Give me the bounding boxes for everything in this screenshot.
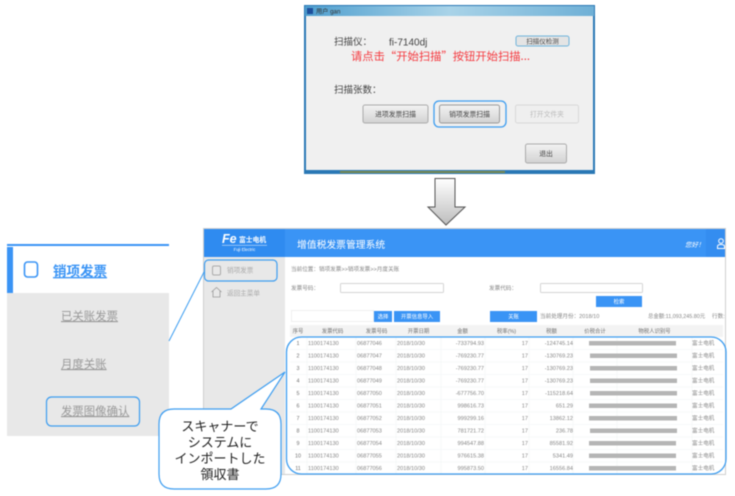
table rows: -130769.23: [545, 366, 573, 372]
table rows: -130769.23: [545, 379, 573, 385]
search form: 检索: [614, 298, 625, 306]
callout text: 領収書: [200, 467, 240, 482]
table rows: -733794.93: [456, 341, 484, 347]
callout text: システムに: [188, 435, 252, 450]
table rows: 06877048: [357, 366, 382, 372]
table rows: 06877056: [357, 466, 382, 472]
table rows: 1100174130: [308, 379, 339, 385]
table rows: -677756.70: [456, 391, 484, 397]
table rows: 06877047: [357, 354, 382, 360]
table rows: 17: [522, 354, 528, 360]
invoice image confirm link: 发票图像确认: [61, 404, 130, 418]
table rows: 17: [522, 441, 528, 447]
logo block: Fe: [222, 232, 237, 246]
table rows: 1: [296, 341, 300, 347]
toolbar: [292, 310, 725, 322]
greeting: 您好！: [685, 241, 704, 249]
table rows: 富士电机: [692, 339, 715, 347]
table rows: 富士电机: [692, 352, 715, 360]
table rows: -769230.77: [456, 354, 484, 360]
table rows: 2018/10/30: [397, 341, 425, 347]
sales invoice scan button: [440, 105, 500, 123]
open folder button: 打开文件夹: [530, 110, 564, 118]
invoice table: [290, 325, 723, 474]
red instruction: 请点击“开始扫描”按钮开始扫描...: [351, 48, 530, 64]
toolbar: 关账: [508, 312, 519, 320]
breadcrumb: 当前位置：销项发票>>销项发票>>月度关账: [291, 265, 400, 273]
table rows: 17: [522, 466, 528, 472]
menu heading: 销项发票: [53, 263, 107, 279]
highlight on confirm link: [46, 397, 140, 426]
table rows: 1100174130: [308, 341, 339, 347]
table rows: 1100174130: [308, 366, 339, 372]
table rows: 2018/10/30: [397, 466, 425, 472]
toolbar: 行数:: [712, 312, 725, 320]
panel: zoomed menu: [7, 244, 169, 436]
logo block: 富士电机: [239, 235, 266, 244]
table rows: 85581.92: [550, 441, 573, 447]
search form: 发票号码：: [291, 284, 319, 292]
callout text: スキャナーで: [181, 419, 259, 434]
table rows: -130769.23: [545, 354, 573, 360]
table rows: 富士电机: [692, 389, 715, 397]
table rows: 富士电机: [692, 364, 715, 372]
sidebar item: main menu: 返回主菜单: [227, 288, 260, 298]
table rows: 06877052: [357, 416, 382, 422]
table rows: 10: [295, 454, 301, 460]
table rows: 17: [522, 454, 528, 460]
table rows: 17: [522, 341, 528, 347]
table header: 物税人识别号: [638, 327, 671, 335]
table rows: 2018/10/30: [397, 404, 425, 410]
monthly closing link: 月度关账: [61, 357, 107, 371]
table rows: 8: [296, 429, 300, 435]
table header: 税率(%): [497, 327, 516, 335]
table rows: 1100174130: [308, 466, 339, 472]
table rows: 2: [296, 354, 300, 360]
arrow: down: [428, 178, 465, 225]
scan count label: 扫描张数：: [334, 84, 382, 96]
table rows: 2018/10/30: [397, 416, 425, 422]
table rows: 06877046: [357, 341, 382, 347]
table header: 序号: [293, 327, 304, 335]
scanner label: 扫描仪：: [334, 36, 372, 48]
table rows: 976615.38: [458, 454, 484, 460]
table header: 开票日期: [408, 328, 429, 335]
table rows: 4: [296, 379, 300, 385]
table rows: 1100174130: [308, 404, 339, 410]
header bar: [204, 229, 725, 257]
table rows: 富士电机: [692, 377, 715, 385]
table rows: 2018/10/30: [397, 441, 425, 447]
table rows: 7: [296, 416, 300, 422]
table header: [290, 325, 723, 337]
table rows: 994547.88: [458, 441, 484, 447]
toolbar: 选择: [378, 312, 389, 320]
table rows: 06877051: [357, 404, 382, 410]
table rows: 富士电机: [692, 427, 715, 435]
table rows: 17: [522, 416, 528, 422]
scanner check button: [516, 36, 569, 46]
table rows: 16556.84: [550, 466, 573, 472]
exit button: [526, 144, 566, 163]
table rows: 6: [296, 404, 300, 410]
table rows: 1100174130: [308, 391, 339, 397]
scanner check button: 扫描仪检测: [526, 36, 559, 46]
table rows: 富士电机: [692, 464, 715, 472]
table rows: 998616.73: [458, 404, 484, 410]
table rows: 651.29: [556, 404, 573, 410]
table rows: -769230.77: [456, 366, 484, 372]
search form: [291, 284, 642, 307]
scanner model: fi-7140dj: [389, 38, 427, 48]
table rows: 13862.12: [550, 416, 573, 422]
table header: 发票代码: [322, 327, 344, 335]
callout text: [174, 419, 266, 482]
table rows: -115218.64: [545, 391, 573, 397]
callout text: インポートした: [174, 451, 266, 466]
exit button: 退出: [539, 149, 553, 158]
table rows: 06877049: [357, 379, 382, 385]
sidebar item: main menu: [212, 288, 260, 298]
table rows: 富士电机: [692, 402, 715, 410]
table rows: 5: [296, 391, 300, 397]
toolbar: 开票信息导入: [401, 312, 434, 320]
table rows: 2018/10/30: [397, 354, 425, 360]
table rows: -769230.77: [456, 379, 484, 385]
toolbar: 总金额:11,093,245.80元: [648, 312, 706, 320]
dialog title: 用户 gan: [316, 8, 341, 16]
table rows: 1100174130: [308, 416, 339, 422]
table header: 税额: [546, 327, 557, 335]
table rows: 06877054: [357, 441, 382, 447]
icon: user: [718, 239, 724, 248]
table rows: 999299.16: [458, 416, 484, 422]
table rows: 06877050: [357, 391, 382, 397]
table rows: 2018/10/30: [397, 454, 425, 460]
table rows: [295, 339, 715, 472]
table rows: 1100174130: [308, 454, 339, 460]
search form: 发票代码：: [489, 284, 517, 292]
table rows: 17: [522, 391, 528, 397]
sidebar item: sales invoice: [212, 266, 254, 275]
table rows: 236.78: [556, 429, 573, 435]
icon: checkbox: [24, 262, 38, 277]
toolbar: 当前处理月份：2018/10: [540, 312, 599, 320]
table rows: -124745.14: [545, 341, 573, 347]
table rows: 2018/10/30: [397, 366, 425, 372]
table rows: 1100174130: [308, 429, 339, 435]
purchase invoice scan button: 进项发票扫描: [375, 110, 416, 118]
table rows: 3: [296, 366, 300, 372]
sales invoice scan button: 销项发票扫描: [449, 110, 490, 118]
logo block: Fuji Electric: [234, 247, 255, 252]
table rows: 06877053: [357, 429, 382, 435]
table rows: 2018/10/30: [397, 429, 425, 435]
table rows: 1100174130: [308, 354, 339, 360]
table rows: 富士电机: [692, 439, 715, 447]
table rows: 富士电机: [692, 414, 715, 422]
table header: 金额: [457, 327, 468, 335]
sidebar item: sales invoice: 销项发票: [227, 266, 254, 274]
table rows: 2018/10/30: [397, 379, 425, 385]
table rows: 17: [522, 404, 528, 410]
table rows: 11: [295, 466, 301, 472]
sidebar: [204, 257, 285, 474]
scanner dialog window: [304, 5, 595, 174]
system title: 增值税发票管理系统: [297, 238, 385, 251]
icon: dialog app: [307, 8, 313, 14]
table rows: 06877055: [357, 454, 382, 460]
table rows: 17: [522, 366, 528, 372]
table rows: 17: [522, 379, 528, 385]
callout: [159, 372, 285, 489]
table header: 价税合计: [584, 327, 606, 335]
table rows: 2018/10/30: [397, 391, 425, 397]
application window: [204, 228, 726, 474]
table header: 发票号码: [366, 327, 388, 335]
logo block: [204, 229, 285, 257]
highlight on sidebar item: [204, 260, 277, 281]
closed invoices link: 已关账发票: [61, 309, 118, 323]
table rows: 17: [522, 429, 528, 435]
connector line from menu to sidebar: [169, 272, 204, 341]
table rows: 富士电机: [692, 452, 715, 460]
table rows: 1100174130: [308, 441, 339, 447]
highlight on sales invoice scan button: [434, 101, 506, 127]
table rows: 5341.49: [553, 454, 573, 460]
table rows: 9: [296, 441, 300, 447]
purchase invoice scan button: [363, 105, 428, 123]
highlight on table rows: [286, 337, 726, 474]
open folder button: [516, 105, 578, 123]
table rows: 781721.72: [458, 429, 484, 435]
table rows: 995873.50: [458, 466, 484, 472]
